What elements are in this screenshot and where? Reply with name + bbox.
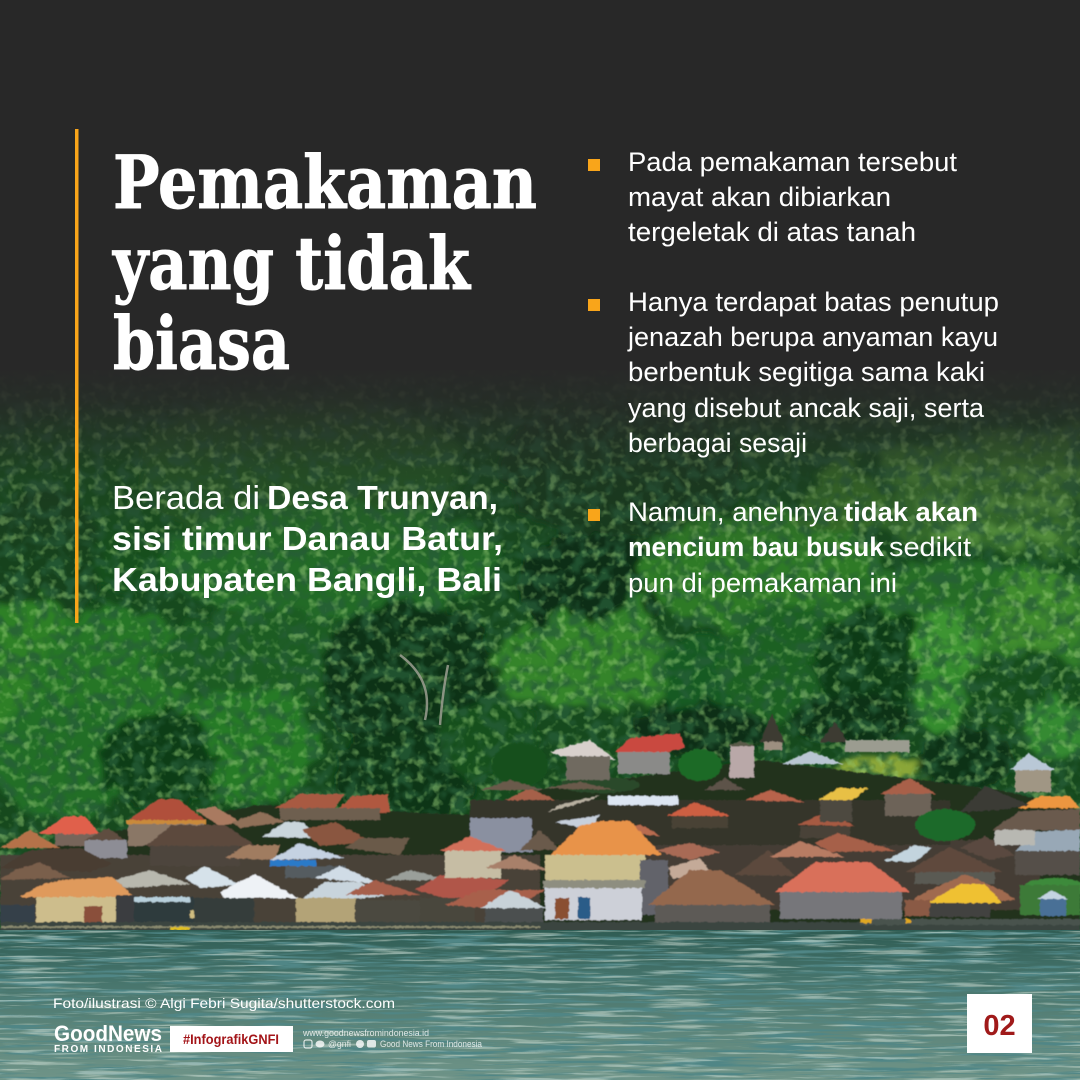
subtitle: location: sisi timur Danau Batur, bbox=[112, 520, 503, 557]
subtitle: location bbox=[112, 479, 503, 598]
bullet 3: pun di pemakaman ini bbox=[628, 568, 897, 598]
bullet 1 bbox=[588, 147, 958, 247]
lake water bbox=[0, 930, 1080, 1080]
orange accent bar bbox=[75, 129, 78, 623]
bullet 2 bbox=[588, 287, 999, 458]
social links: www.goodnewsfromindonesia.id bbox=[302, 1028, 429, 1038]
bullet 3: sedikit bbox=[889, 532, 972, 562]
bullet 2: Hanya terdapat batas penutup bbox=[628, 287, 999, 317]
logo: GoodNews from Indonesia: FROM INDONESIA bbox=[54, 1044, 162, 1055]
icon: twitter bbox=[316, 1040, 324, 1048]
houses centre bbox=[385, 714, 936, 922]
title: biasa bbox=[113, 301, 290, 387]
subtitle: location: Kabupaten Bangli, Bali bbox=[112, 561, 502, 598]
bullet 3: Namun, anehnya bbox=[628, 497, 839, 527]
bullet 1: mayat akan dibiarkan bbox=[628, 182, 891, 212]
dock along the shore bbox=[0, 919, 1080, 931]
title: yang tidak bbox=[112, 221, 471, 307]
icon: facebook bbox=[356, 1040, 364, 1048]
bullet marker bbox=[588, 299, 600, 311]
bullet 3: mencium bau busuk bbox=[628, 532, 885, 562]
photo credit: Foto/ilustrasi © Algi Febri Sugita/shutterstock.com bbox=[53, 995, 395, 1011]
forest hillside bbox=[0, 370, 1080, 940]
title: Pemakaman bbox=[113, 140, 537, 226]
hashtag label: #InfografikGNFI bbox=[183, 1031, 279, 1047]
village houses bbox=[0, 714, 1080, 931]
subtitle: location: Berada di bbox=[112, 479, 260, 516]
page number: 02 bbox=[983, 1010, 1016, 1042]
logo: GoodNews from Indonesia: GoodNews bbox=[54, 1021, 162, 1046]
icon: instagram bbox=[304, 1040, 312, 1048]
page number bbox=[967, 994, 1032, 1053]
subtitle: location: Desa Trunyan, bbox=[267, 479, 498, 516]
title bbox=[112, 140, 537, 387]
bullet 3 bbox=[588, 497, 978, 598]
bullet 1: Pada pemakaman tersebut bbox=[628, 147, 958, 177]
hashtag label bbox=[170, 1026, 293, 1052]
social links bbox=[302, 1028, 482, 1049]
houses left bbox=[0, 794, 425, 927]
bullet 2: berbentuk segitiga sama kaki bbox=[628, 357, 985, 387]
bullet marker bbox=[588, 509, 600, 521]
bullet 2: yang disebut ancak saji, serta bbox=[628, 393, 985, 423]
bullet 2: berbagai sesaji bbox=[628, 428, 807, 458]
bullet 3: tidak akan bbox=[844, 497, 978, 527]
houses right bbox=[648, 753, 1080, 923]
social links: @gnfi bbox=[328, 1039, 351, 1049]
bullet marker bbox=[588, 159, 600, 171]
bullet 1: tergeletak di atas tanah bbox=[628, 217, 916, 247]
icon: youtube bbox=[367, 1040, 376, 1048]
bullet 2: jenazah berupa anyaman kayu bbox=[627, 322, 998, 352]
big orange house bbox=[543, 821, 668, 920]
social links: Good News From Indonesia bbox=[380, 1039, 482, 1049]
